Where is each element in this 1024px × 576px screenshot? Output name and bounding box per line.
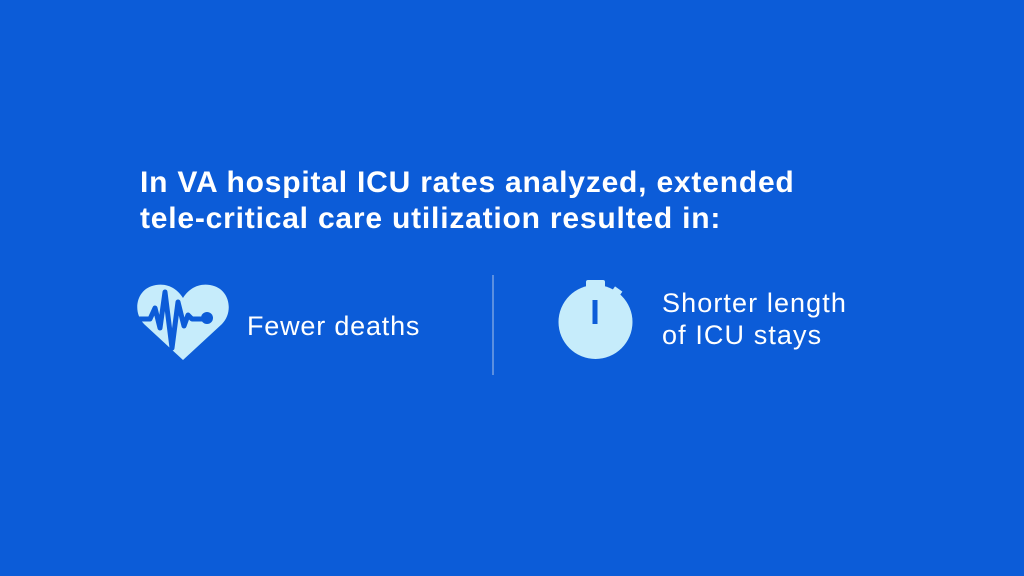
- icon: stopwatch: [558, 280, 632, 359]
- divider: [492, 275, 494, 375]
- icon: heart with pulse: [137, 284, 229, 360]
- text: shorter length of ICU stays: Shorter length: [662, 288, 847, 318]
- title: [140, 166, 795, 235]
- text: shorter length of ICU stays: of ICU stays: [662, 320, 822, 350]
- title: tele-critical care utilization resulted in:: [140, 202, 721, 235]
- text: fewer deaths: Fewer deaths: [247, 311, 420, 341]
- text: shorter length of ICU stays: [662, 288, 847, 350]
- title: In VA hospital ICU rates analyzed, extended: [140, 166, 795, 199]
